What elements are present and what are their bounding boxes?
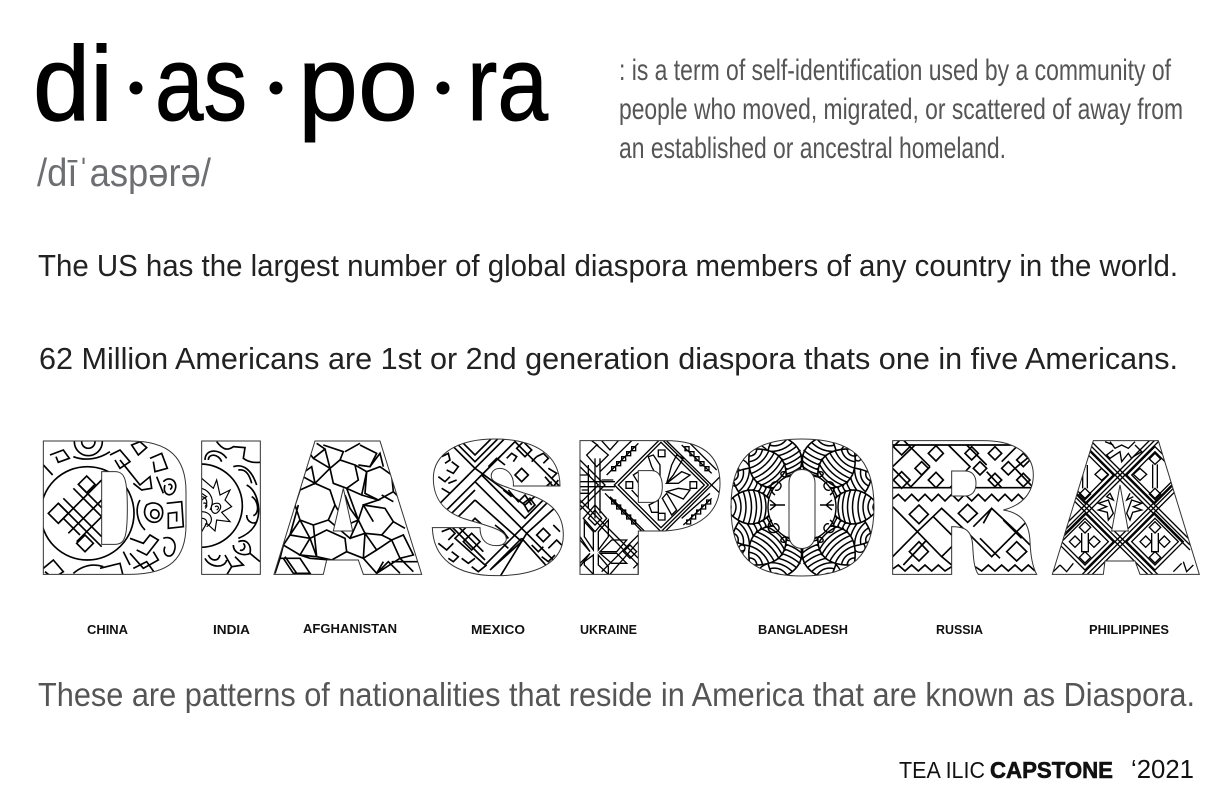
country labels — [87, 622, 1169, 637]
definition text block — [619, 54, 1183, 165]
letter I: India pattern — [201, 440, 261, 575]
title: di·as·po·ra: di — [33, 25, 113, 143]
country labels: UKRAINE — [580, 623, 637, 637]
letter O: Bangladesh pattern — [730, 438, 874, 576]
country labels: RUSSIA — [936, 623, 983, 637]
title: di·as·po·ra: ra — [467, 25, 548, 143]
letter D: China pattern — [42, 440, 186, 575]
letter R: Russia pattern — [893, 438, 1037, 574]
title: di·as·po·ra: as — [155, 25, 247, 143]
statement: 62 million Americans: 62 Million Americans are 1st or 2nd generation diaspora thats one in five Americans. — [39, 341, 1178, 376]
definition text block: an established or ancestral homeland. — [619, 132, 1006, 165]
title: di·as·po·ra: po — [298, 25, 418, 143]
country labels: CHINA — [87, 623, 128, 637]
country labels: AFGHANISTAN — [303, 622, 397, 636]
pronunciation: /dīˈaspərə/ — [37, 152, 211, 195]
country labels: MEXICO — [471, 623, 525, 637]
country labels: INDIA — [213, 623, 250, 637]
letter S: Mexico pattern — [432, 437, 565, 577]
statement: largest number of diaspora members: The US has the largest number of global diaspora members of any country in the world. — [38, 248, 1178, 283]
patterned word DIASPORA — [42, 438, 1200, 576]
credit line: CAPSTONE — [990, 757, 1113, 783]
title: di·as·po·ra — [33, 25, 548, 143]
letter A: Afghanistan pattern — [274, 441, 422, 574]
credit line: TEA ILIC — [899, 757, 985, 783]
letter P: Ukraine pattern — [580, 438, 720, 574]
country labels: BANGLADESH — [758, 623, 848, 637]
credit line: ‘2021 — [1131, 754, 1194, 784]
credit line — [899, 754, 1194, 784]
country labels: PHILIPPINES — [1089, 623, 1169, 637]
letter A: Philippines pattern — [1040, 438, 1199, 575]
